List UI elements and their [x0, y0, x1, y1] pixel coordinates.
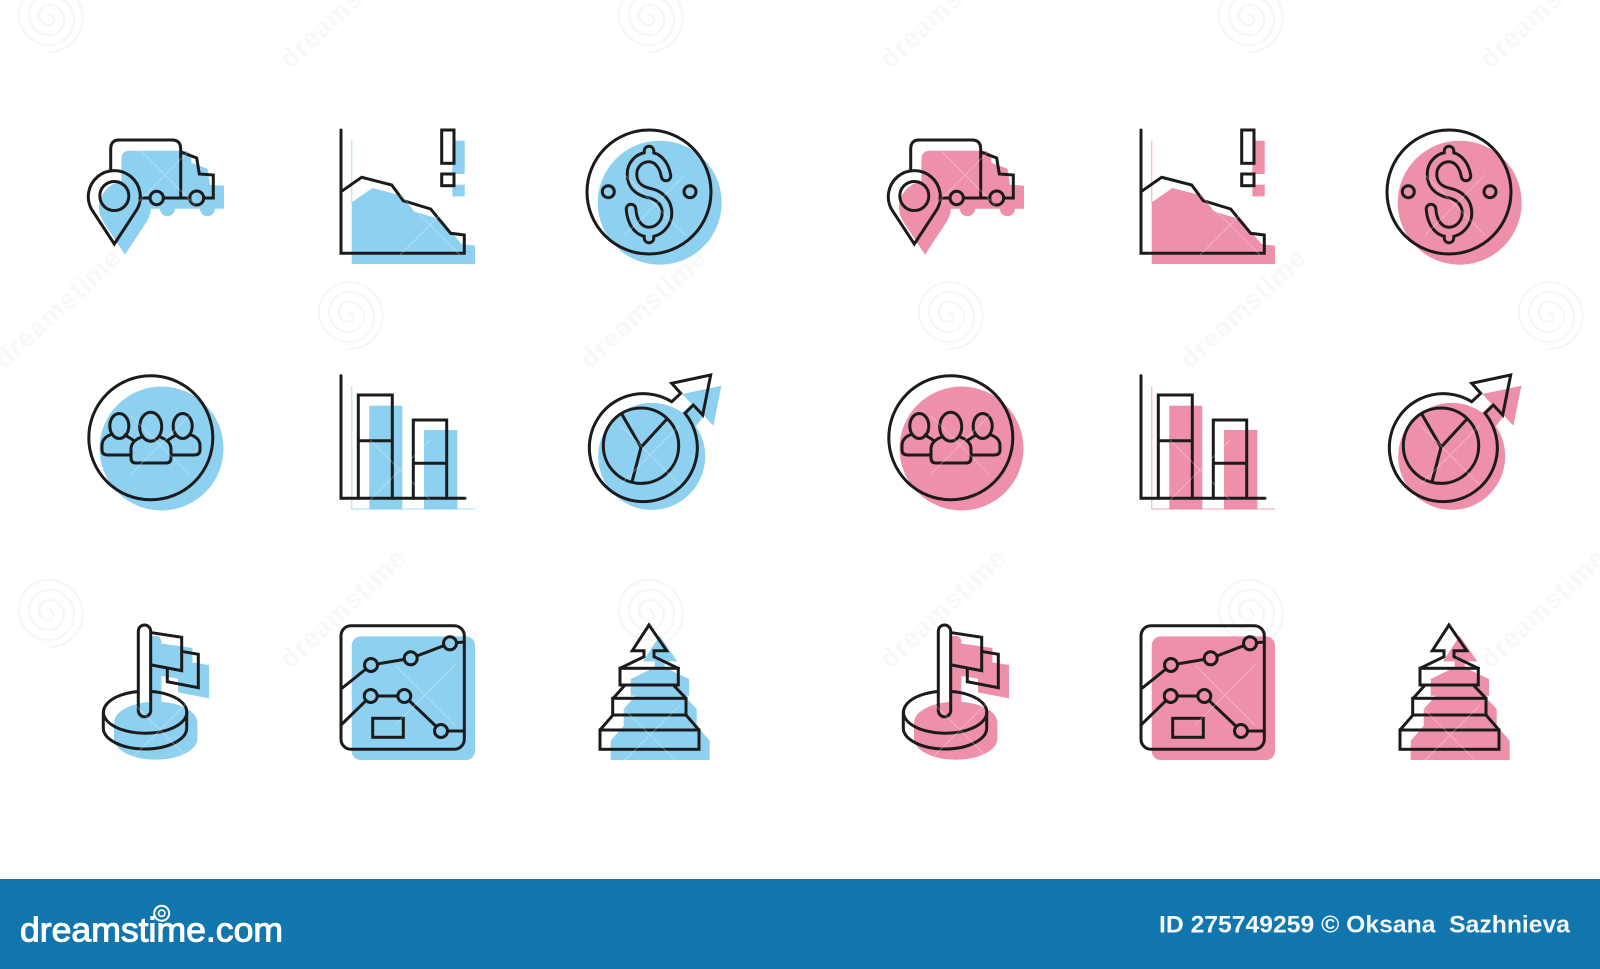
icon: stepped pyramid arrow (pink) [1400, 625, 1510, 760]
icon: dollar coin (pink) [1387, 130, 1522, 265]
icon: line graph board (pink) [1141, 626, 1275, 760]
panel: pink icon set [888, 130, 1522, 765]
panel: blue icon set [88, 130, 722, 765]
icon: pie chart with arrow (blue) [589, 375, 721, 510]
icon: falling chart with exclamation (blue) [341, 130, 475, 264]
footer credit text: ID 275749259 © Oksana Sazhnieva [1159, 912, 1570, 939]
icon: truck with location pin (blue) [88, 140, 224, 255]
icon: falling chart with exclamation (pink) [1141, 130, 1275, 264]
watermark pattern: dreamstime [574, 242, 712, 374]
watermark pattern: dreamstime [874, 542, 1012, 674]
icon: bar chart (pink) [1141, 376, 1275, 509]
icon: dollar coin (blue) [587, 130, 722, 265]
icon: flag on base (pink) [903, 625, 1009, 760]
icon: people group circle (blue) [89, 376, 224, 510]
watermark pattern: dreamstime [274, 542, 412, 674]
footer band [0, 879, 1600, 969]
icon: line graph board (blue) [341, 626, 475, 760]
icon: truck with location pin (pink) [888, 140, 1024, 255]
icon: stepped pyramid arrow (blue) [600, 625, 710, 760]
watermark pattern [0, 0, 1600, 674]
icon: logo spiral [154, 906, 169, 921]
icon: flag on base (blue) [103, 625, 209, 760]
icon: pie chart with arrow (pink) [1389, 375, 1521, 510]
icon: bar chart (blue) [341, 376, 475, 509]
watermark pattern: dreamstime [1174, 242, 1312, 374]
footer logo text: dreamstime.com [20, 912, 283, 950]
icon: people group circle (pink) [889, 376, 1024, 510]
